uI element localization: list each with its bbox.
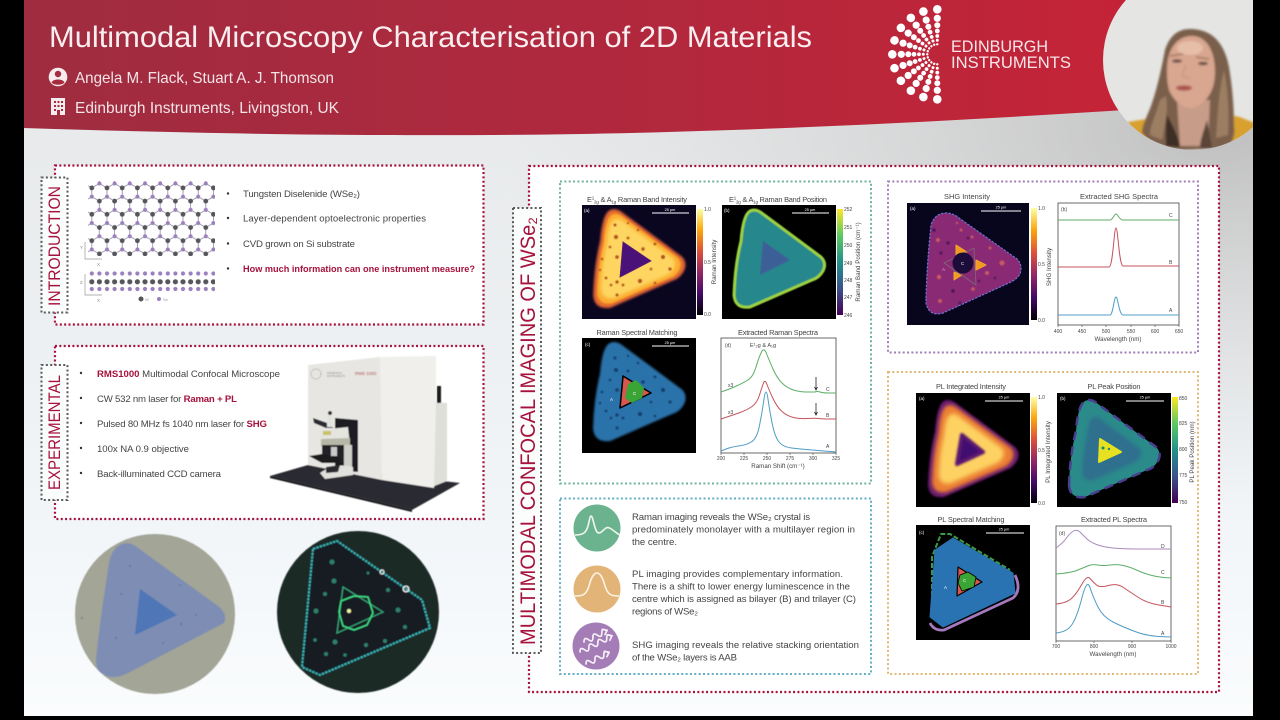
yellow top [1127,114,1253,142]
text: Raman finding: the centre. [632,537,677,548]
image: dark-field fluorescence micrograph circle [277,531,439,693]
map (b): Raman band position: 247 [844,295,853,301]
map (b): PL peak position: 825 [1179,421,1188,427]
diagram: WSe2 lattice top view: Y [80,245,83,250]
map (a): Raman band intensity: Raman Intensity [711,239,718,284]
side slot [437,386,441,403]
map (c): PL spectral matching: A [944,585,947,590]
text: PL finding [632,569,856,618]
icon: person [49,68,67,86]
map (a): Raman band intensity: Raman Band Intensity [616,195,687,204]
chart (b): extracted SHG spectra: 550 [1127,329,1135,335]
diagram: WSe2 lattice side view: X [97,298,100,303]
face [1167,36,1215,108]
map (a): SHG intensity: 1.0 [1038,206,1045,212]
chart (b): extracted SHG spectra: B [1169,260,1173,266]
chart (d): extracted PL spectra: Wavelength (nm) [1090,651,1136,658]
chart (d): extracted Raman spectra: x3 [728,383,734,389]
chart (b): extracted SHG spectra: A [1169,308,1173,314]
chart (d): extracted PL spectra: B [1161,600,1165,606]
icon: building [51,98,65,115]
map (a): PL integrated intensity: 0.5 [1038,448,1045,454]
chart (d): extracted Raman spectra: B [826,413,830,419]
chart (b): extracted SHG spectra: C [1169,213,1173,219]
bullet list: experimental: Pulsed 80 MHz fs 1040 nm laser for SHG [97,419,267,430]
map (a): SHG intensity: (a) [910,206,916,211]
chart (d): extracted Raman spectra: 325 [832,456,840,462]
map (c): Raman spectral matching: Raman Spectral Matching [596,328,678,337]
map (b): Raman band position: 249 [844,261,853,267]
eyes and brows [1170,54,1209,59]
PL spectrum B [1056,578,1171,607]
map (a): Raman band intensity: 0.5 [704,260,711,266]
map (b): Raman band position: 248 [844,278,853,284]
bullet list: introduction: How much information can one instrument measure? [243,264,475,275]
logo wordmark: EDINBURGH [951,38,1048,56]
chart (d): extracted Raman spectra: Extracted Raman Spectra [738,328,819,337]
chart (d): extracted Raman spectra: (d) [725,343,731,349]
diagram: WSe2 lattice side view: Z [80,280,83,285]
diagram: WSe2 lattice side view: W [145,297,149,302]
map (c): Raman spectral matching: 25 µm [665,341,675,345]
diagram: WSe2 lattice side view: Se [163,297,169,302]
chart (b): extracted SHG spectra: 600 [1151,329,1159,335]
map (b): Raman band position: 246 [844,313,853,319]
chart (d): extracted PL spectra [1052,515,1177,658]
chart (d): extracted Raman spectra: 275 [786,456,794,462]
map (c): PL spectral matching [916,515,1030,640]
SHG spectrum A [1058,297,1179,315]
chart (d): extracted Raman spectra: C [826,387,830,393]
text: PL finding: There is a shift to lower energy luminescence in the [632,582,850,592]
map (c): Raman spectral matching: C [633,391,637,396]
map (a): PL integrated intensity: PL Integrated Intensity [936,382,1006,391]
map (b): PL peak position: PL Peak Position (nm) [1189,421,1196,483]
affiliation: Edinburgh Instruments, Livingston, UK [75,100,340,117]
panel: Raman imaging [560,182,871,484]
icon: SHG wavy arrows [572,622,620,670]
map (b): Raman band position: 251 [844,225,853,231]
image: RMS1000 microscope: INSTRUMENTS [327,375,345,378]
diagram: WSe2 lattice top view [80,181,215,267]
map (a): SHG intensity: 0.0 [1038,318,1045,324]
map (a): Raman band intensity: E [587,195,592,204]
map (c): Raman spectral matching: (c) [585,342,591,347]
map (b): PL peak position: 750 [1179,500,1188,506]
neck [1177,100,1210,146]
bullet list: introduction [227,189,475,275]
map (a): Raman band intensity: 1g [611,200,617,204]
SHG spots [932,222,1004,304]
PL spectrum C [1056,565,1171,578]
text: PL finding: PL imaging provides complementary information. [632,569,843,580]
map (a): Raman band intensity: 1.0 [704,207,711,213]
chart (b): extracted SHG spectra: 450 [1078,329,1086,335]
map (b): Raman band position: Raman Band Position (cm⁻¹) [855,222,862,302]
section tag: introduction [42,178,68,312]
chart (b): extracted SHG spectra: Wavelength (nm) [1095,336,1141,343]
diagram: WSe2 lattice side view [80,270,215,303]
image: RMS1000 microscope [270,356,460,512]
map (a): SHG intensity: 25 µm [996,206,1006,210]
SHG spectrum C [1058,214,1179,220]
chart (d): extracted Raman spectra: x3 [728,410,734,416]
map (a): Raman band intensity: & A [599,195,612,204]
title: Multimodal Microscopy Characterisation of 2D Materials [49,21,812,54]
map (b): PL peak position: PL Peak Position [1088,382,1140,391]
panel: SHG imaging [888,182,1198,352]
section tag: multimodal confocal imaging of WSe2: MULTIMODAL CONFOCAL IMAGING OF WSe₂ [517,217,540,645]
text: Raman finding: Raman imaging reveals the WSe₂ crystal is [632,512,810,523]
text: Raman finding [632,512,855,548]
logo: Edinburgh Instruments [888,5,1071,104]
chart (d): extracted PL spectra: 900 [1128,644,1136,650]
map (a): Raman band intensity: 2g [594,200,599,204]
map (c): PL spectral matching: (c) [919,530,925,535]
map (b): Raman band position: 2g [736,200,741,204]
SHG spectrum B [1058,228,1179,267]
map (a): Raman band intensity: 0.0 [704,312,711,318]
map (b): PL peak position: 25 µm [1140,396,1150,400]
map (c): Raman spectral matching [582,328,696,453]
map (b): Raman band position [722,195,862,319]
map (a): PL integrated intensity: 0.0 [1038,501,1045,507]
map (a): Raman band intensity [582,195,718,319]
text: SHG finding [632,640,859,664]
Raman spectrum B [721,381,836,419]
map (a): SHG intensity: SHG Intensity [1046,247,1053,286]
map (a): Raman band intensity: 1 [592,196,595,200]
microscope [309,411,353,479]
chart (d): extracted PL spectra: C [1161,570,1165,576]
map (b): Raman band position: 250 [844,243,853,249]
map (a): SHG intensity: A [942,267,945,272]
panel: multimodal confocal imaging [513,166,1219,692]
text: PL finding: regions of WSe₂ [632,606,698,618]
map (b): Raman band position: 1g [753,200,758,204]
map (a): Raman band intensity: 25 µm [665,208,675,212]
hair [1142,29,1234,150]
chart (d): extracted Raman spectra: A [826,444,830,450]
header banner [24,0,1140,135]
text: SHG finding: SHG imaging reveals the relative stacking orientation [632,640,859,651]
bullet list: introduction: Tungsten Diselenide (WSe₂) [243,189,360,200]
chart (d): extracted Raman spectra [717,328,840,470]
icon: Raman spectrum [574,504,620,552]
map (b): PL peak position [1057,382,1196,507]
image: RMS1000 microscope: EDINBURGH [327,372,342,375]
PL spectrum A [1056,584,1171,637]
image: optical micrograph circle [75,534,235,694]
bullet list: introduction: CVD grown on Si substrate [243,239,355,250]
body labels: RMS 1000 [355,371,377,376]
map (b): Raman band position: E [729,195,734,204]
map (a): SHG intensity [907,192,1053,325]
map (b): PL peak position: 850 [1179,396,1188,402]
bullet list: introduction: Layer-dependent optoelectronic properties [243,214,426,224]
chart (b): extracted SHG spectra: Extracted SHG Spectra [1080,192,1159,201]
chart (d): extracted PL spectra: 1000 [1165,644,1177,650]
panel: experimental [42,346,484,519]
right tower [432,402,447,487]
chart (d): extracted Raman spectra: 200 [717,456,725,462]
chart (d): extracted PL spectra: D [1161,544,1165,550]
arrows at peak positions [814,377,818,415]
chart (b): extracted SHG spectra: (b) [1061,207,1067,213]
chart (b): extracted SHG spectra: 400 [1054,329,1062,335]
map (b): Raman band position: & A [741,195,753,204]
mouth [1176,85,1192,91]
map (a): SHG intensity: C [961,261,965,266]
Raman spectrum C [721,350,836,393]
section tag: introduction: INTRODUCTION [46,186,64,306]
bullet list: experimental: CW 532 nm laser for Raman + PL [97,394,237,405]
map (a): Raman band intensity: (a) [584,208,590,213]
chart (d): extracted Raman spectra: Raman Shift (cm⁻¹) [751,463,805,470]
text: PL finding: centre which is assigned as bilayer (B) and trilayer (C) [632,594,856,605]
chart (d): extracted PL spectra: 800 [1090,644,1098,650]
map (c): PL spectral matching: 25 µm [999,528,1009,532]
map (a): SHG intensity: 0.5 [1038,262,1045,268]
panel: PL imaging [888,372,1198,674]
map (c): PL spectral matching: C [963,578,967,583]
bullet list: experimental: RMS1000 Multimodal Confocal Microscope [97,369,280,380]
chart (d): extracted PL spectra: 700 [1052,644,1060,650]
chart (d): extracted PL spectra: (d) [1059,531,1065,537]
map (a): PL integrated intensity [916,382,1052,507]
chart (d): extracted Raman spectra: 300 [809,456,817,462]
map (b): Raman band position: 252 [844,207,853,213]
chart (b): extracted SHG spectra: 650 [1175,329,1183,335]
map (b): Raman band position: 25 µm [805,208,815,212]
map (a): PL integrated intensity: (a) [919,396,925,401]
chart (d): extracted Raman spectra: 225 [740,456,748,462]
chart (d): extracted Raman spectra: E¹₂g & A₁g [750,343,776,349]
icon: PL spectrum [574,566,620,612]
map (a): SHG intensity: SHG Intensity [944,192,990,201]
bullet list: experimental: 100x NA 0.9 objective [97,444,189,455]
right panel [380,356,436,488]
dark hair by the neck [1166,115,1180,147]
map (b): PL peak position: 800 [1179,447,1188,453]
authors: Angela M. Flack, Stuart A. J. Thomson [75,70,334,87]
PL spectrum D [1056,530,1171,549]
map (b): PL peak position: (b) [1060,396,1066,401]
bullet list: experimental: Back-illuminated CCD camera [97,469,222,480]
map (a): PL integrated intensity: PL Integrated Intensity [1045,420,1052,483]
map (b): PL peak position: 775 [1179,473,1188,479]
instrument recess [335,418,358,472]
logo dot fan [888,5,942,104]
presenter video circle [1103,0,1253,150]
chart (d): extracted PL spectra: A [1161,631,1165,637]
chart (b): extracted SHG spectra: 500 [1102,329,1110,335]
text: Raman finding: predominately monolayer with a multilayer region in [632,524,855,536]
panel: introduction [42,166,484,324]
section tag: experimental: EXPERIMENTAL [46,375,64,490]
logo wordmark [951,38,1071,72]
logo wordmark: INSTRUMENTS [951,54,1071,72]
chart (d): extracted Raman spectra: 250 [763,456,771,462]
panel: conclusions [560,498,871,674]
chart (b): extracted SHG spectra [1054,192,1183,343]
Raman spectrum A [721,392,836,452]
diagram: WSe2 lattice top view: X [97,262,100,267]
chart (d): extracted PL spectra: Extracted PL Spectra [1081,515,1148,524]
map (c): Raman spectral matching: A [610,397,613,402]
map (c): PL spectral matching: PL Spectral Matching [938,515,1004,524]
section tag: experimental [42,365,68,500]
text: SHG finding: of the WSe₂ layers is AAB [632,652,737,664]
bullet list: experimental [80,369,280,480]
map (b): Raman band position: 1 [734,196,737,200]
map (b): Raman band position: Raman Band Position [758,195,827,204]
map (a): PL integrated intensity: 1.0 [1038,395,1045,401]
map (b): Raman band position: (b) [724,208,730,213]
left panel [308,357,382,480]
map (a): PL integrated intensity: 25 µm [999,396,1009,400]
base plate [270,465,460,510]
